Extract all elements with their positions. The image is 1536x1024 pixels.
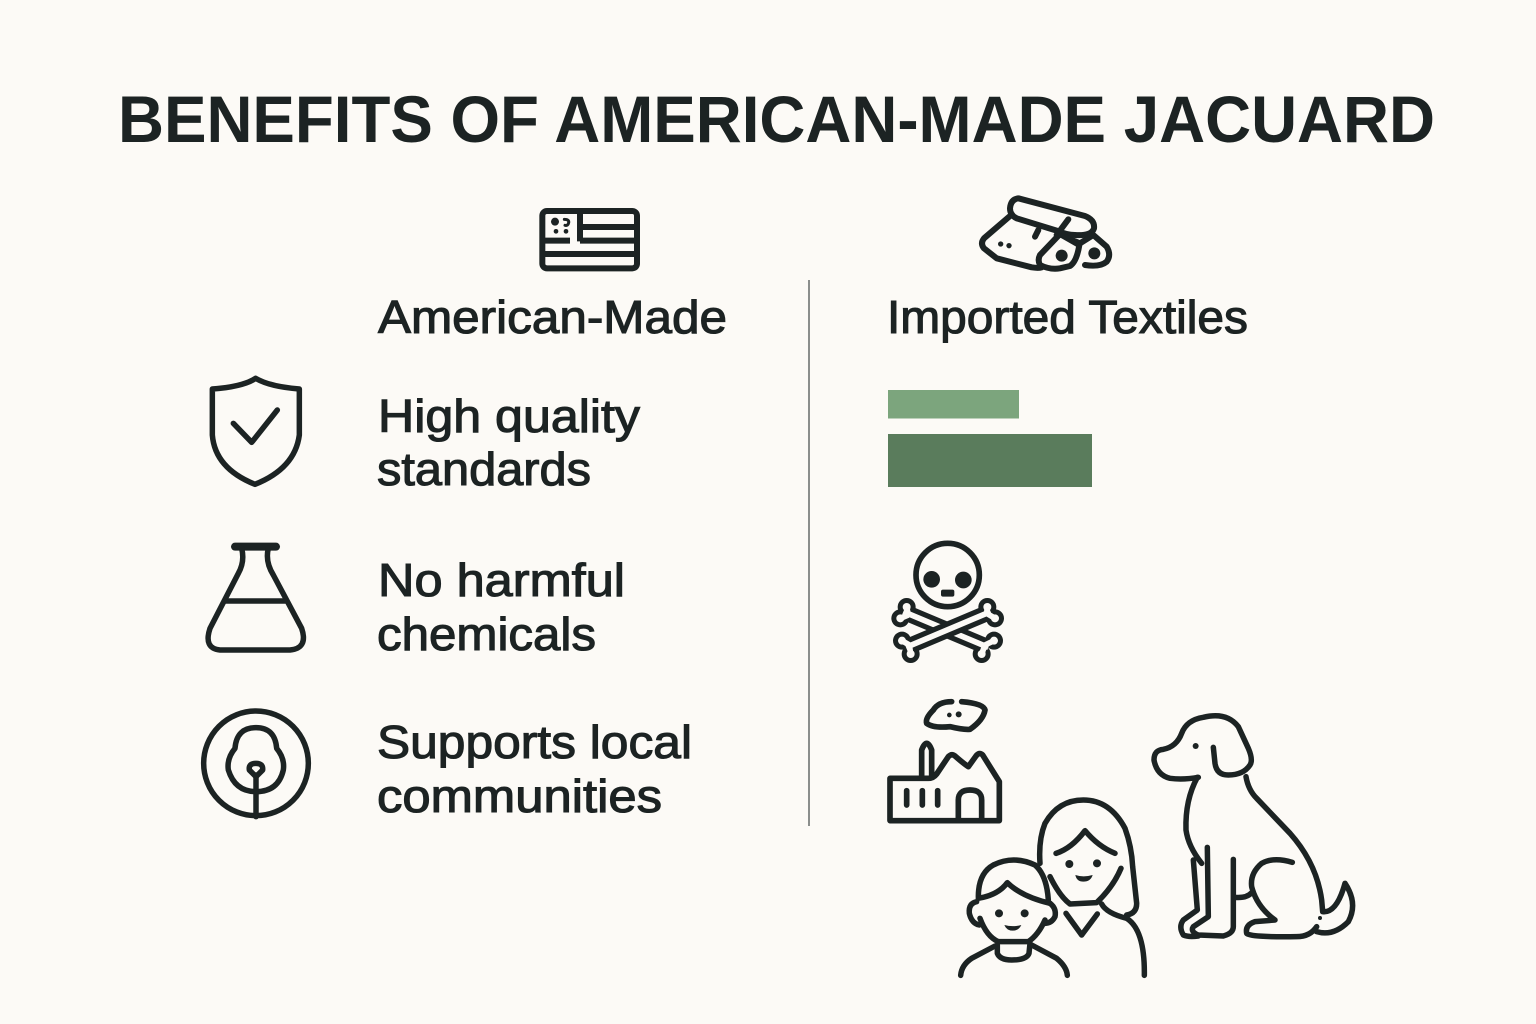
icon: shield with check [212,378,299,484]
text: supports local communities: communities [377,770,662,822]
icon: factory [890,743,999,821]
text: no harmful chemicals: No harmful [378,554,625,606]
icon: woman [1040,800,1144,975]
title: BENEFITS OF AMERICAN-MADE JACUARD [118,82,1435,156]
icon: dog [1154,716,1353,937]
heading: American-Made: American-Made [378,291,727,343]
icon: flask [208,547,303,650]
icon: textile rolls [982,198,1109,269]
text: high quality standards [377,390,640,495]
text: high quality standards: High quality [378,390,640,442]
heading: Imported Textiles: Imported Textiles [887,291,1248,343]
text: no harmful chemicals: chemicals [377,608,596,660]
text: supports local communities: Supports local [377,716,692,768]
bar chart: imported textiles [888,390,1092,487]
icon: American flag [542,211,637,268]
text: supports local communities [377,716,692,822]
center divider [808,280,810,826]
text: high quality standards: standards [377,443,591,495]
icon: boy [961,860,1067,975]
icon: tree in circle [204,711,308,817]
icon: smoke cloud [926,702,985,729]
text: no harmful chemicals [377,554,625,660]
icon: skull and crossbones [891,543,1004,663]
